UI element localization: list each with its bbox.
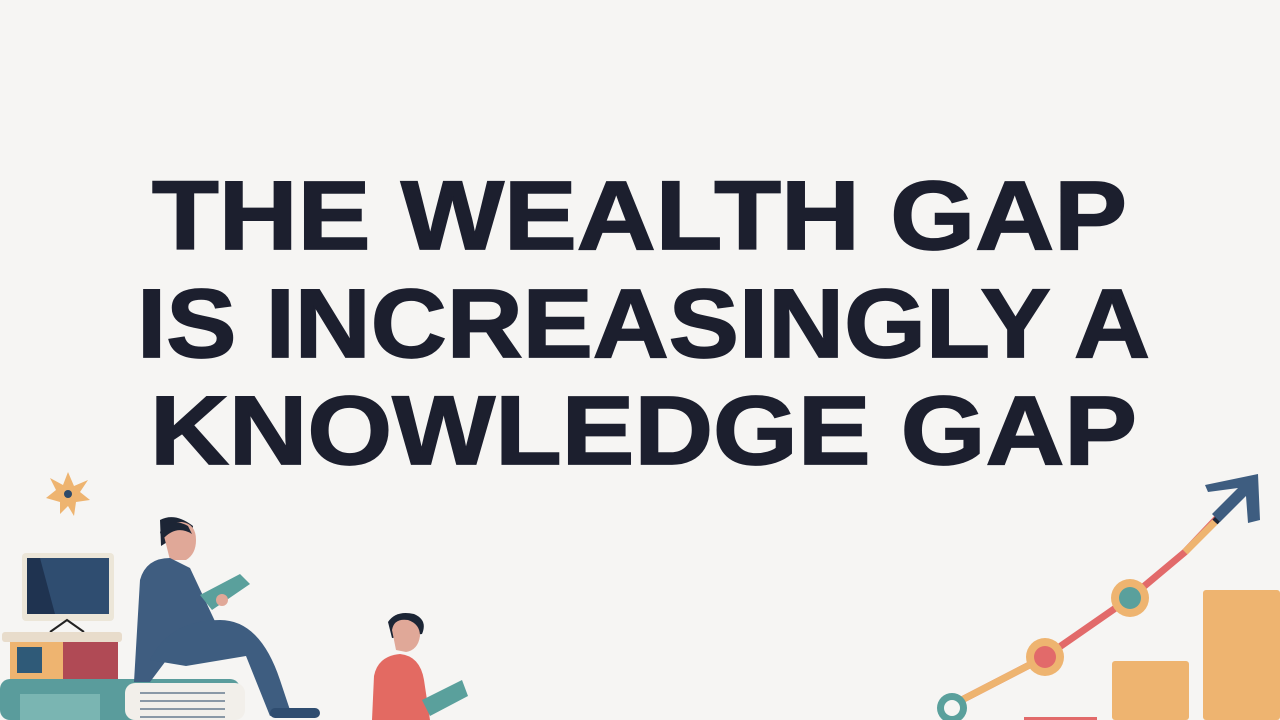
illustration: desk with monitor <box>2 553 122 679</box>
icon: arrow <box>1205 474 1260 523</box>
illustration: stacked books <box>0 679 245 720</box>
title: KNOWLEDGE GAP <box>150 376 1137 485</box>
icon: star <box>46 472 90 516</box>
illustration: boy reading <box>372 613 468 720</box>
chart: bars <box>1024 590 1280 720</box>
illustration: man reading <box>134 517 320 718</box>
chart: rising line with markers <box>937 474 1260 720</box>
title: IS INCREASINGLY A <box>137 269 1150 378</box>
title <box>137 161 1150 485</box>
title: THE WEALTH GAP <box>152 161 1127 270</box>
